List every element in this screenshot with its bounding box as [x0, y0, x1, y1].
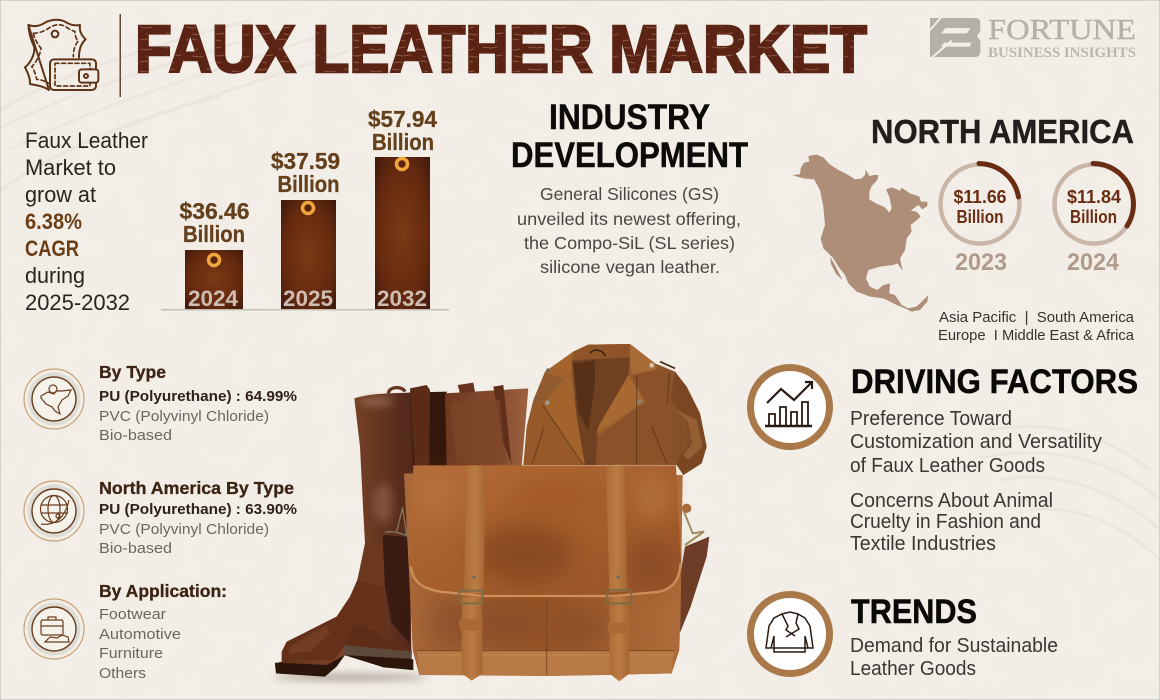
- donut: 2024: Billion: [1070, 207, 1117, 227]
- text: driving factor one: Preference Toward: [850, 408, 1012, 430]
- segment: north america by type: [24, 478, 297, 557]
- donut: 2024: $11.84: [1067, 187, 1121, 207]
- bag straps: [459, 465, 631, 681]
- segment items: PU (Polyurethane) : 64.99%: [99, 388, 297, 405]
- right shoulder strap: [680, 504, 709, 633]
- text: driving factor two: [850, 490, 1053, 555]
- logo mark: [928, 16, 980, 59]
- icon: leather hide and wallet: [25, 20, 98, 90]
- text: driving factor two: Textile Industries: [850, 533, 996, 555]
- segment title: By Application:: [99, 581, 227, 601]
- segment items: [99, 501, 297, 557]
- segment items: Automotive: [99, 626, 181, 643]
- bag buckles: [459, 590, 631, 603]
- text: driving factor two: Cruelty in Fashion and: [850, 511, 1041, 533]
- segment: by type: [24, 362, 297, 444]
- CAGR text block: Faux Leather: [25, 128, 148, 153]
- header divider: [120, 14, 121, 97]
- CAGR text block: 6.38%: [25, 209, 82, 234]
- text: driving factor one: Customization and Versatility: [850, 431, 1102, 453]
- segment items: PVC (Polyvinyl Chloride): [99, 521, 269, 538]
- text: driving factor two: Concerns About Animal: [850, 490, 1053, 512]
- donut: 2023: $11.66: [954, 187, 1006, 207]
- CAGR text block: 2025-2032: [25, 290, 130, 315]
- CAGR text block: grow at: [25, 182, 96, 207]
- left shoulder strap: [383, 507, 410, 643]
- donut: 2023: Billion: [956, 207, 1004, 227]
- bar 2024: Billion: [183, 221, 245, 247]
- bar 2025: [271, 148, 340, 311]
- text: industry development body: the Compo-SiL (SL series): [524, 233, 735, 253]
- segment items: [99, 606, 181, 682]
- text: other regions: [938, 310, 1135, 344]
- text: other regions: Asia Pacific | South America: [939, 310, 1135, 326]
- ground shadow: [273, 673, 427, 681]
- heading: trends: TRENDS: [851, 593, 977, 631]
- text: industry development body: silicone vegan leather.: [540, 257, 720, 277]
- bar 2032: Billion: [372, 129, 434, 155]
- map: north america: [793, 155, 928, 312]
- bag flap: [410, 465, 681, 595]
- bar 2025: 2025: [283, 286, 333, 311]
- heading: industry development: DEVELOPMENT: [511, 136, 748, 175]
- icon: briefcase and shoe: [24, 599, 84, 659]
- bar 2024: $36.46: [180, 198, 250, 224]
- logo name: FORTUNE: [988, 15, 1136, 46]
- segment items: Furniture: [99, 645, 163, 662]
- segment title: By Type: [99, 362, 166, 382]
- bar 2024: 2024: [188, 286, 239, 311]
- bar 2025: Billion: [278, 171, 340, 197]
- segment items: PVC (Polyvinyl Chloride): [99, 408, 269, 425]
- text: industry development body: [517, 184, 741, 277]
- jacket: [523, 344, 707, 475]
- CAGR text block: Market to: [25, 155, 116, 180]
- text: trends body: Leather Goods: [850, 658, 976, 680]
- heading: industry development: [511, 98, 748, 175]
- right boot: [408, 383, 528, 487]
- logo tagline: BUSINESS INSIGHTS: [988, 45, 1136, 61]
- text: industry development body: General Silicones (GS): [540, 184, 719, 204]
- messenger bag: [404, 465, 683, 681]
- icon: map pin: [24, 369, 84, 429]
- segment items: Bio-based: [99, 540, 172, 557]
- text: driving factor one: [850, 408, 1102, 477]
- title: FAUX LEATHER MARKET: [135, 12, 867, 87]
- text: industry development body: unveiled its newest offering,: [517, 209, 741, 229]
- icon: jacket badge: [750, 594, 830, 674]
- segment items: PU (Polyurethane) : 63.90%: [99, 501, 297, 518]
- bar 2032: $57.94: [368, 106, 437, 132]
- bag body: [404, 473, 683, 676]
- heading: driving factors: DRIVING FACTORS: [851, 363, 1138, 401]
- CAGR text block: CAGR: [25, 236, 79, 261]
- bar 2025: $37.59: [271, 148, 340, 174]
- illustration: boots, jacket and messenger bag: [273, 344, 709, 681]
- logo: Fortune Business Insights: [928, 15, 1136, 61]
- segment items: Footwear: [99, 606, 166, 623]
- text: trends body: [850, 635, 1058, 680]
- donut: 2024: 2024: [1067, 249, 1120, 276]
- left boot: [275, 388, 414, 677]
- text: driving factor one: of Faux Leather Goods: [850, 455, 1045, 477]
- icon: growth chart badge: [750, 368, 830, 446]
- text: trends body: Demand for Sustainable: [850, 635, 1058, 657]
- segment: by application: [24, 581, 227, 682]
- donut: 2023: 2023: [955, 249, 1007, 276]
- bar 2032: [368, 106, 437, 311]
- segment items: [99, 388, 297, 444]
- bar 2024: [180, 198, 250, 311]
- CAGR text block: [25, 128, 148, 315]
- bar 2032: 2032: [377, 286, 427, 311]
- donut: 2024: [1054, 164, 1134, 276]
- CAGR text block: during: [25, 263, 85, 288]
- text: other regions: Europe I Middle East & Africa: [938, 328, 1135, 344]
- segment items: Bio-based: [99, 427, 172, 444]
- icon: globe: [24, 481, 84, 541]
- heading: industry development: INDUSTRY: [549, 98, 710, 137]
- segment items: Others: [99, 665, 146, 682]
- segment title: North America By Type: [99, 478, 294, 498]
- heading: north america: NORTH AMERICA: [871, 113, 1134, 150]
- donut: 2023: [940, 164, 1020, 276]
- bar chart: market size: [161, 106, 449, 311]
